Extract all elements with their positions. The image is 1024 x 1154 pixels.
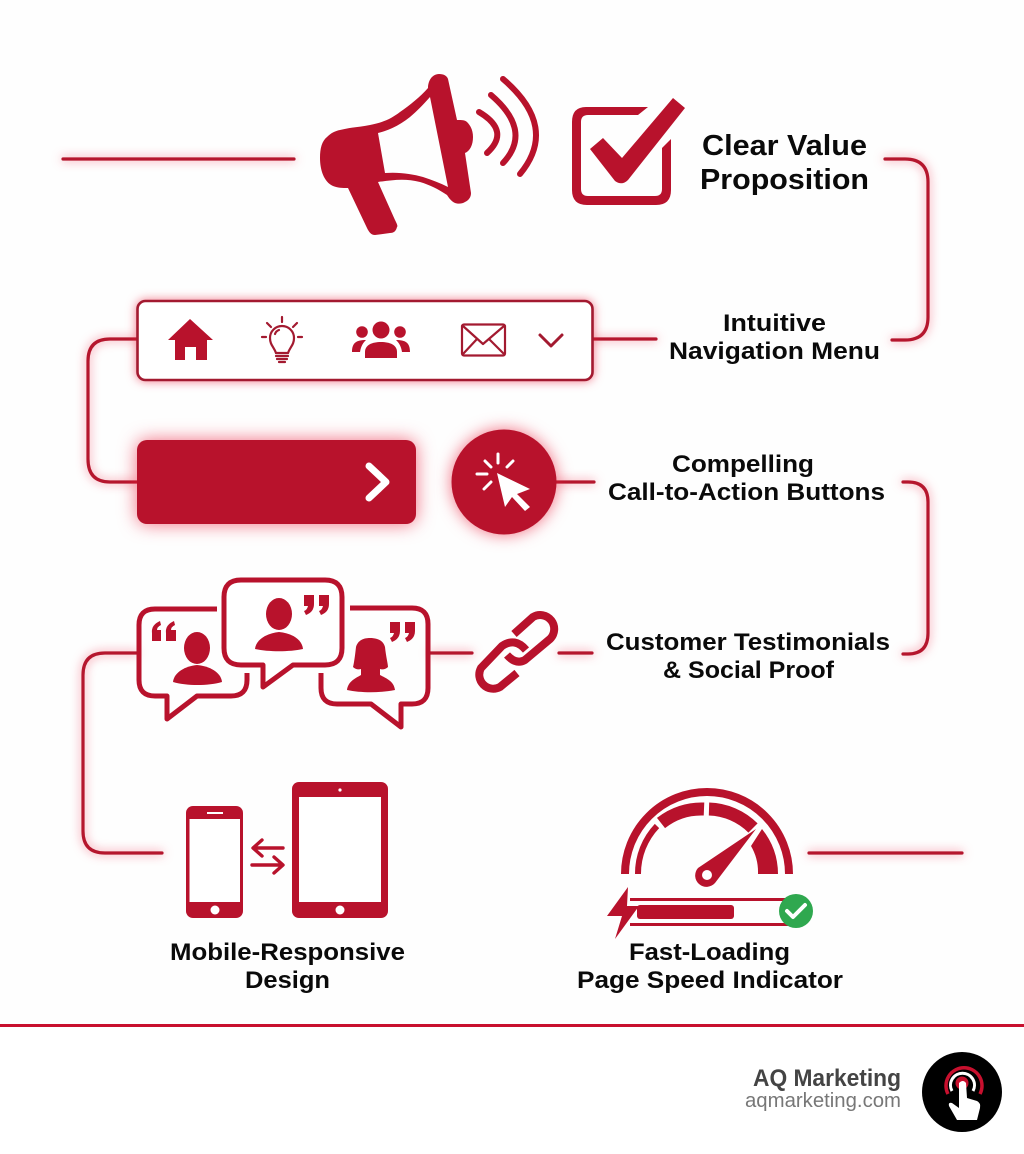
footer brand text: [745, 1065, 901, 1112]
label: clear value proposition: Clear Value: [702, 130, 867, 162]
call-to-action button: [137, 440, 416, 524]
label: fast-loading page speed indicator: Page Speed Indicator: [577, 967, 843, 994]
label: compelling call-to-action buttons: Compelling: [672, 451, 814, 478]
icon: light bulb: [262, 317, 302, 362]
label: intuitive navigation menu: [669, 310, 880, 365]
label: clear value proposition: Proposition: [700, 164, 869, 196]
icon: dropdown chevron: [540, 335, 562, 346]
icon: testimonial speech bubbles: [139, 580, 428, 727]
footer brand text: AQ Marketing: [753, 1065, 901, 1092]
panel: navigation menu bar: [138, 301, 592, 380]
tablet: [292, 782, 388, 918]
left bubble: [139, 609, 247, 719]
footer brand text: aqmarketing.com: [745, 1090, 901, 1112]
icon: speedometer gauge: [625, 792, 789, 887]
label: mobile-responsive design: Mobile-Responsive: [170, 939, 405, 966]
icon: home: [168, 319, 213, 360]
icon: mobile and tablet: [186, 782, 388, 918]
label: clear value proposition: [700, 130, 869, 196]
label: intuitive navigation menu: Intuitive: [723, 310, 826, 337]
label: compelling call-to-action buttons: Call-to-Action Buttons: [608, 479, 885, 506]
label: mobile-responsive design: [170, 939, 405, 994]
icon: page speed progress bar: [607, 887, 813, 939]
label: customer testimonials and social proof: [606, 629, 890, 684]
icon: click cursor circle: [452, 430, 556, 534]
label: mobile-responsive design: Design: [245, 967, 330, 994]
label: customer testimonials and social proof: & Social Proof: [663, 657, 835, 684]
icon: megaphone: [320, 74, 536, 235]
connector lines: [63, 159, 962, 853]
icon: chain link: [479, 615, 554, 689]
phone: [186, 806, 243, 918]
label: customer testimonials and social proof: Customer Testimonials: [606, 629, 890, 656]
label: intuitive navigation menu: Navigation Menu: [669, 338, 880, 365]
icon: checkbox with check mark: [572, 98, 685, 205]
label: compelling call-to-action buttons: [608, 451, 885, 506]
icon: envelope: [462, 324, 505, 356]
footer band: [0, 1024, 1024, 1154]
logo: pointing hand with signal: [922, 1052, 1002, 1132]
icon: people group: [352, 322, 410, 358]
label: fast-loading page speed indicator: [577, 939, 843, 994]
label: fast-loading page speed indicator: Fast-Loading: [629, 939, 790, 966]
center bubble: [224, 580, 342, 687]
responsive arrows: [252, 840, 283, 873]
right bubble: [321, 608, 428, 727]
